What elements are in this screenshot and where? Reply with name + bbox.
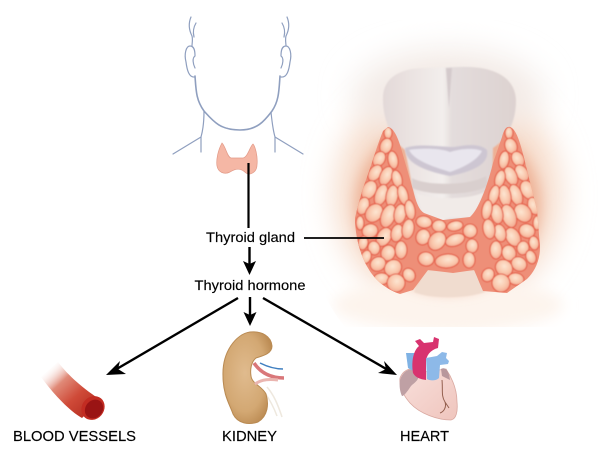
leader line to gland bbox=[304, 237, 384, 239]
label: heart: HEART bbox=[400, 429, 449, 445]
soft background glow bbox=[333, 50, 563, 331]
trachea and larynx bbox=[383, 67, 516, 297]
label: blood vessels: BLOOD VESSELS bbox=[13, 429, 136, 445]
icon: heart bbox=[400, 337, 457, 420]
icon: blood vessel bbox=[41, 362, 109, 425]
icon: kidney bbox=[223, 332, 284, 423]
arrow: neck to thyroid gland label bbox=[247, 163, 250, 228]
arrow: hormone to kidney bbox=[244, 297, 256, 326]
head outline bbox=[173, 17, 303, 154]
label: kidney: KIDNEY bbox=[222, 429, 277, 445]
arrow: hormone to heart bbox=[263, 298, 397, 375]
arrow: hormone to blood vessels bbox=[106, 298, 238, 375]
panel: thyroid illustration bbox=[333, 50, 563, 331]
small thyroid on neck bbox=[217, 143, 257, 174]
arrow: gland to hormone bbox=[243, 247, 256, 275]
label: thyroid gland: Thyroid gland bbox=[206, 229, 295, 245]
label: thyroid hormone: Thyroid hormone bbox=[194, 277, 306, 293]
thyroid gland bbox=[354, 127, 543, 294]
